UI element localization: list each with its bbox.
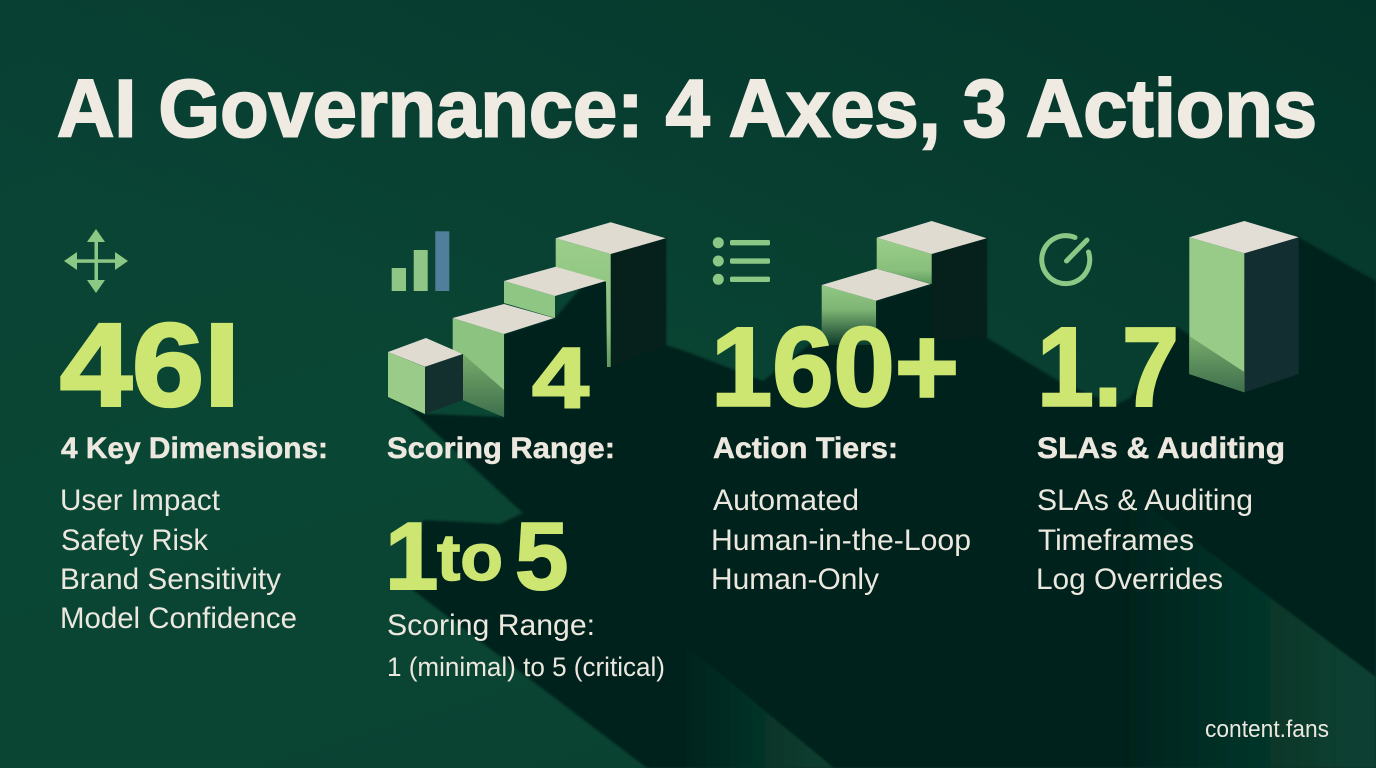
heading: 4 Key Dimensions: 4 Key Dimensions: [61, 432, 328, 465]
big number: 46I: 46I [60, 300, 240, 432]
big number: 1 to 5: 1 [385, 503, 438, 610]
list: dimensions [60, 484, 297, 635]
list: audit items: Log Overrides [1036, 563, 1223, 596]
panel: 4 key dimensions [60, 229, 328, 635]
list: tiers [711, 484, 971, 596]
list: tiers: Automated [713, 484, 859, 517]
icon: bar chart [392, 231, 449, 291]
list: audit items [1036, 484, 1253, 596]
panel: SLAs and auditing [1036, 221, 1299, 596]
icon: gauge [1042, 236, 1090, 284]
big number: 160+: 160+ [711, 304, 959, 430]
text: scoring range description: Scoring Range: [387, 609, 595, 642]
big number: 1.7: 1.7 [1037, 304, 1179, 430]
heading: SLAs and Auditing: SLAs & Auditing [1037, 432, 1285, 465]
big number: 1 to 5: to [437, 520, 503, 594]
list: dimensions: User Impact [60, 484, 221, 517]
list: dimensions: Safety Risk [61, 524, 209, 557]
heading: Scoring Range: Scoring Range: [387, 432, 615, 465]
list: dimensions: Model Confidence [60, 602, 297, 635]
staircase: two steps [822, 221, 987, 345]
list: tiers: Human-in-the-Loop [711, 524, 971, 557]
list: dimensions: Brand Sensitivity [60, 563, 281, 596]
icon: list [713, 237, 770, 285]
panel: action tiers [711, 221, 987, 596]
text: scoring range description: 1 (minimal) to 5 (critical) [387, 652, 665, 682]
big number: 4: 4 [532, 330, 589, 426]
list: tiers: Human-Only [711, 563, 879, 596]
text: scoring range description [387, 609, 665, 682]
list: audit items: Timeframes [1038, 524, 1194, 557]
column block [1189, 221, 1299, 392]
big number: 1 to 5 [385, 503, 568, 610]
staircase: four steps [388, 222, 666, 417]
big number: 1 to 5: 5 [515, 503, 568, 610]
title: AI Governance: 4 Axes, 3 Actions [57, 64, 1317, 154]
footer brand: content.fans [1205, 716, 1329, 743]
panel: scoring range [385, 222, 666, 682]
list: audit items: SLAs & Auditing [1037, 484, 1253, 517]
long cast shadow [388, 237, 1376, 768]
icon: four-way arrows [64, 229, 128, 293]
heading: Action Tiers: Action Tiers: [713, 432, 898, 465]
